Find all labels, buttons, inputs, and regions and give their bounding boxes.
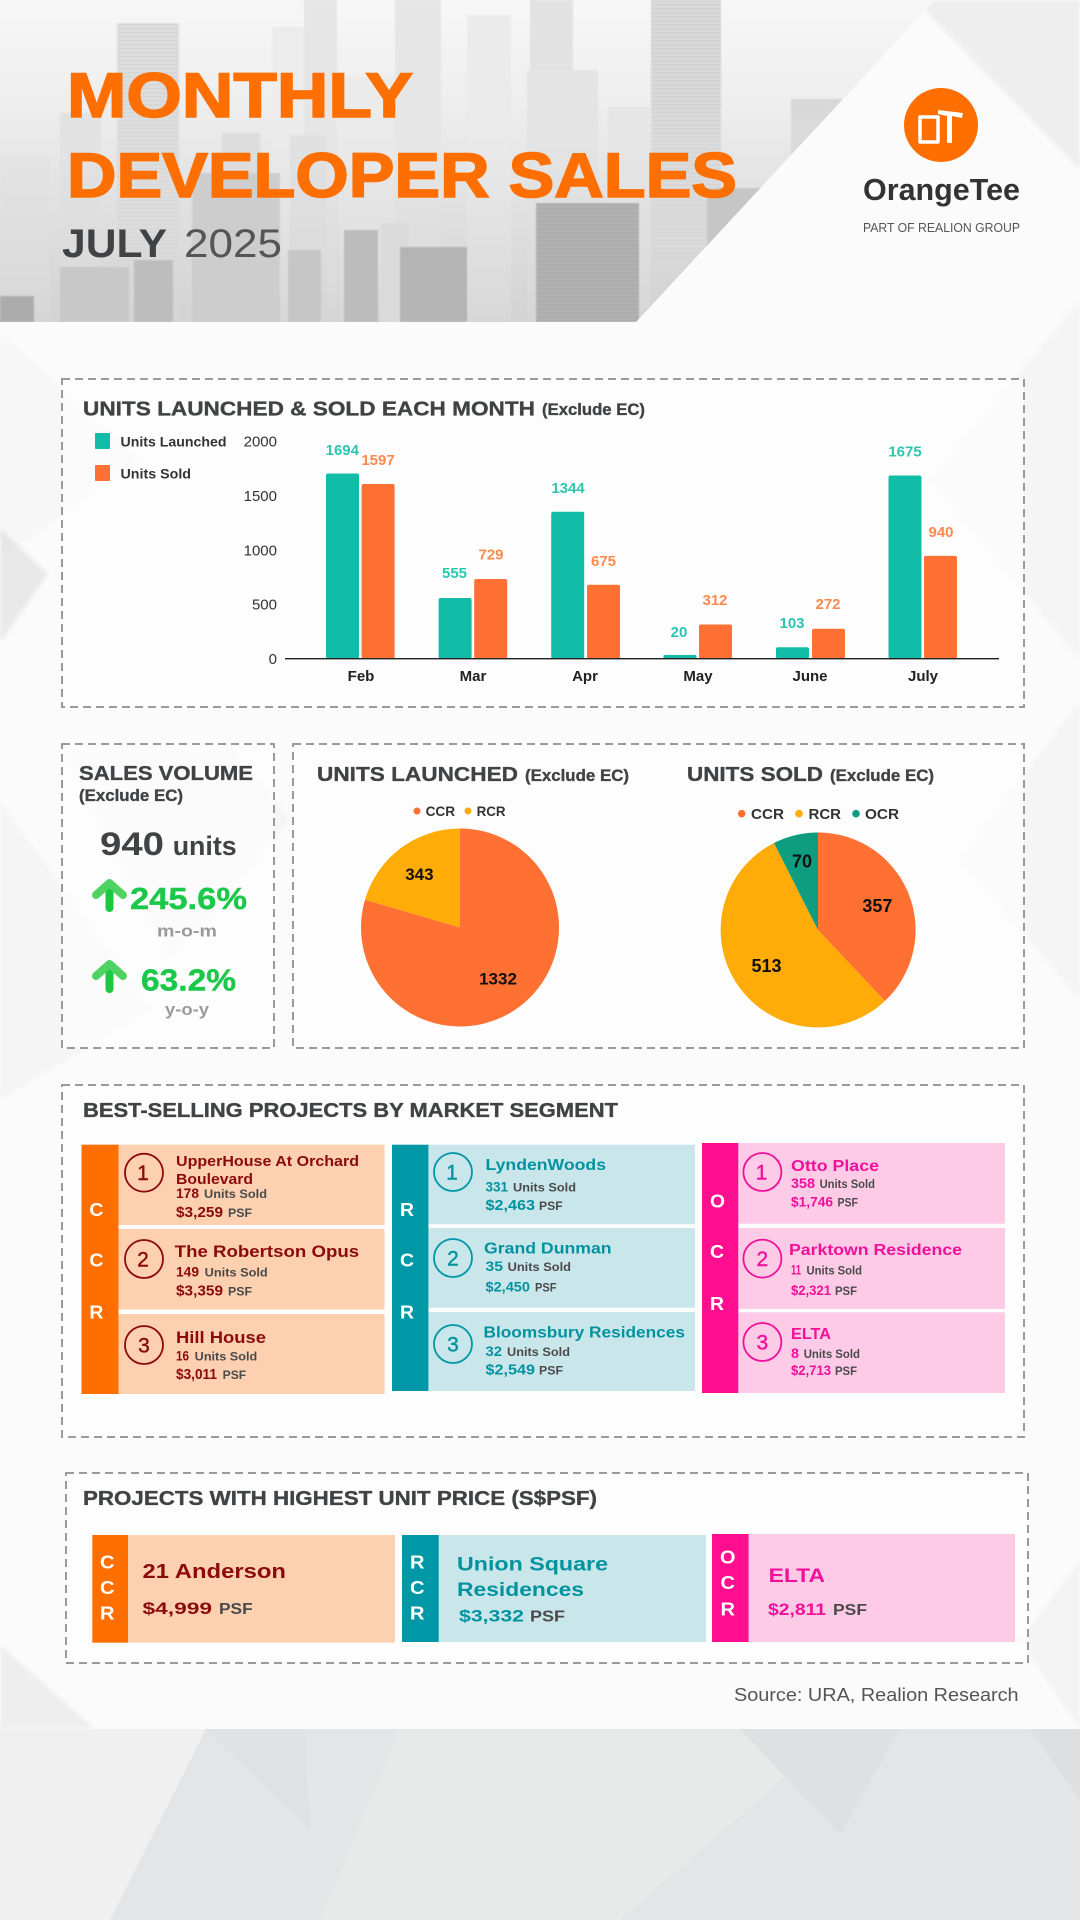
card: CCR 21 Anderson: PSF — [219, 1601, 253, 1618]
column: RCR — [392, 1145, 695, 1391]
heading: highest unit price: PROJECTS WITH HIGHEST UNIT PRICE (S$PSF) — [83, 1487, 597, 1510]
project: Hill House: PSF — [223, 1368, 246, 1382]
title: MONTHLY — [67, 61, 413, 131]
y axis labels: 500 — [252, 596, 277, 614]
project: Grand Dunman: $2,450 — [486, 1279, 530, 1295]
card: OCR ELTA: PSF — [833, 1602, 867, 1619]
subtitle: July 2025 — [62, 222, 282, 266]
title: DEVELOPER SALES — [67, 141, 737, 211]
project: Otto Place: $1,746 — [791, 1194, 833, 1210]
panel: units launched and sold each month — [62, 379, 1024, 707]
card: RCR Union Square Residences: R — [410, 1552, 424, 1572]
project: UpperHouse At Orchard Boulevard: UpperHouse At Orchard — [176, 1153, 359, 1170]
project: Parktown Residence: Units Sold — [806, 1266, 862, 1278]
heading: sales volume — [79, 763, 253, 805]
project: ELTA: 8 — [791, 1345, 799, 1361]
y axis labels — [244, 434, 277, 668]
icon: up arrow month on month — [96, 883, 123, 908]
project: Parktown Residence: 11 — [791, 1262, 801, 1278]
project: Bloomsbury Residences: 32 — [486, 1343, 502, 1359]
bar value labels: 312 — [702, 592, 728, 609]
card: OCR ELTA — [712, 1534, 1015, 1642]
project: Bloomsbury Residences — [484, 1324, 685, 1379]
stat: 940 units: 940 — [100, 826, 164, 862]
project: UpperHouse At Orchard Boulevard: Units Sold — [204, 1187, 267, 1201]
project: LyndenWoods: 331 — [486, 1178, 508, 1194]
legend — [95, 433, 226, 482]
legend: units sold pie: CCR — [751, 806, 784, 823]
panel: sales volume — [62, 744, 274, 1048]
stat: 245.6% m-o-m — [130, 881, 247, 940]
skyline header image — [0, 0, 940, 322]
project: The Robertson Opus: $3,359 — [176, 1284, 223, 1300]
project: Bloomsbury Residences: PSF — [539, 1364, 563, 1378]
logo: OrangeTee: PART OF REALION GROUP — [863, 221, 1020, 235]
column: RCR: 1 — [446, 1162, 458, 1184]
column: RCR: 2 — [447, 1248, 459, 1270]
column: RCR: C — [400, 1250, 414, 1270]
stat: 245.6% m-o-m: 245.6% — [130, 881, 247, 916]
project: The Robertson Opus: Units Sold — [205, 1266, 268, 1280]
heading: units sold — [687, 763, 934, 786]
month labels — [348, 668, 939, 685]
column: OCR: 1 — [756, 1162, 767, 1184]
project: UpperHouse At Orchard Boulevard: $3,259 — [176, 1205, 223, 1221]
card: CCR 21 Anderson — [92, 1535, 395, 1643]
project: UpperHouse At Orchard Boulevard — [176, 1153, 359, 1221]
project: UpperHouse At Orchard Boulevard: 178 — [176, 1185, 199, 1201]
project: Grand Dunman: PSF — [535, 1283, 556, 1295]
project: Otto Place: 358 — [791, 1175, 815, 1191]
project: Hill House: Hill House — [176, 1328, 266, 1347]
bar value labels: 940 — [928, 524, 954, 541]
heading: best-selling: BEST-SELLING PROJECTS BY MARKET SEGMENT — [83, 1099, 619, 1122]
column: CCR: 2 — [137, 1248, 149, 1272]
card: RCR Union Square Residences — [402, 1535, 706, 1642]
project: The Robertson Opus: 149 — [176, 1264, 199, 1280]
card: OCR ELTA: $2,811 — [768, 1600, 826, 1619]
stat: 940 units — [100, 826, 237, 862]
column: CCR — [82, 1145, 384, 1394]
y axis labels: 2000 — [244, 434, 277, 450]
column: OCR — [702, 1143, 1005, 1393]
project: Grand Dunman: 35 — [486, 1258, 503, 1274]
column: RCR: 3 — [447, 1334, 459, 1356]
heading: units launched: UNITS LAUNCHED — [317, 763, 518, 786]
column: CCR: C — [89, 1200, 103, 1220]
bar value labels: 1344 — [551, 480, 585, 497]
card: CCR 21 Anderson: $4,999 — [142, 1599, 212, 1618]
project: LyndenWoods: PSF — [539, 1199, 563, 1213]
panel: pie charts — [293, 744, 1024, 1048]
pie chart: units launched: 1332 — [479, 970, 517, 988]
bar value labels: 729 — [478, 546, 504, 564]
project: Parktown Residence: PSF — [835, 1286, 857, 1298]
icon: up arrow year on year — [96, 964, 123, 989]
stat: 63.2% y-o-y: y-o-y — [165, 1001, 210, 1019]
bar value labels — [326, 442, 954, 641]
legend: units launched pie: RCR — [477, 803, 506, 819]
project: Hill House: $3,011 — [176, 1367, 217, 1383]
column: CCR: R — [89, 1302, 103, 1322]
bar value labels: 103 — [779, 615, 805, 632]
legend: Units Sold — [120, 466, 191, 482]
project: Otto Place: Units Sold — [820, 1179, 875, 1191]
project: The Robertson Opus: The Robertson Opus — [175, 1242, 359, 1261]
column: OCR: R — [710, 1294, 724, 1314]
project: ELTA: PSF — [835, 1366, 857, 1378]
column: RCR: R — [400, 1302, 414, 1322]
subtitle: July 2025: JULY — [62, 222, 167, 266]
y axis labels: 1000 — [244, 542, 277, 560]
month labels: Mar — [460, 668, 486, 685]
bar value labels: 1675 — [888, 444, 922, 460]
bar value labels: 675 — [591, 553, 616, 570]
legend: units sold pie: OCR — [865, 806, 899, 823]
y axis labels: 0 — [269, 651, 277, 668]
pie chart: units sold: 357 — [862, 896, 892, 916]
column: OCR: 2 — [757, 1248, 768, 1271]
card: CCR 21 Anderson: C — [100, 1578, 114, 1598]
project: Hill House — [176, 1328, 266, 1383]
column: CCR: C — [89, 1250, 103, 1270]
project: The Robertson Opus: PSF — [228, 1285, 252, 1299]
stat: 63.2% y-o-y — [141, 962, 236, 1019]
heading: units sold: UNITS SOLD — [687, 763, 823, 786]
bar value labels: 272 — [815, 596, 841, 613]
legend: units launched pie: CCR — [426, 803, 455, 819]
stat: 940 units: units — [173, 831, 237, 861]
pie chart: units sold: 70 — [792, 852, 812, 872]
month labels: Apr — [572, 668, 598, 685]
project: Parktown Residence — [789, 1242, 962, 1298]
column: CCR: 1 — [137, 1162, 149, 1185]
project: LyndenWoods: Units Sold — [513, 1180, 576, 1194]
project: Otto Place: PSF — [838, 1198, 858, 1210]
project: LyndenWoods: $2,463 — [486, 1198, 535, 1214]
project: Hill House: 16 — [176, 1348, 189, 1364]
stat: 245.6% m-o-m: m-o-m — [157, 922, 217, 940]
heading: units sold: (Exclude EC) — [830, 767, 934, 785]
month labels: July — [908, 668, 939, 685]
pie chart: units launched: 343 — [405, 865, 434, 884]
legend: units launched pie — [414, 803, 506, 819]
project: Grand Dunman: Units Sold — [508, 1260, 571, 1274]
logo: OrangeTee — [863, 88, 1020, 235]
project: UpperHouse At Orchard Boulevard: PSF — [228, 1206, 252, 1220]
bar chart — [285, 474, 999, 659]
card: OCR ELTA: R — [720, 1600, 735, 1620]
project: Grand Dunman: Grand Dunman — [484, 1240, 612, 1258]
project: UpperHouse At Orchard Boulevard: Boulevard — [176, 1171, 253, 1188]
y axis labels: 1500 — [244, 488, 277, 505]
source note: Source: URA, Realion Research — [734, 1684, 1019, 1705]
bar value labels: 555 — [442, 565, 467, 582]
column: OCR: C — [710, 1242, 724, 1262]
column: OCR: O — [710, 1192, 725, 1212]
bar value labels: 1694 — [326, 442, 360, 459]
card: CCR 21 Anderson: R — [100, 1604, 114, 1624]
project: Parktown Residence: Parktown Residence — [789, 1242, 962, 1259]
bar value labels: 1597 — [361, 452, 395, 469]
project: ELTA: Units Sold — [804, 1349, 860, 1361]
project: ELTA — [791, 1326, 860, 1378]
project: Hill House: Units Sold — [195, 1350, 257, 1364]
heading: units launched — [317, 763, 629, 786]
pie chart: units launched — [361, 828, 559, 1026]
legend: Units Launched — [120, 434, 226, 450]
pie chart: units sold — [721, 832, 916, 1027]
heading: units launched and sold: (Exclude EC) — [542, 401, 645, 419]
project: Bloomsbury Residences: Bloomsbury Residences — [484, 1324, 685, 1342]
month labels: June — [792, 668, 828, 685]
stat: 63.2% y-o-y: 63.2% — [141, 962, 236, 998]
card: RCR Union Square Residences: C — [410, 1578, 424, 1598]
card: CCR 21 Anderson: C — [100, 1552, 114, 1572]
column: RCR: R — [400, 1200, 414, 1220]
heading: units launched: (Exclude EC) — [525, 767, 629, 785]
column: OCR: 3 — [757, 1332, 768, 1354]
card: RCR Union Square Residences: Union Square — [457, 1554, 608, 1576]
card: RCR Union Square Residences: $3,332 — [459, 1607, 524, 1626]
project: LyndenWoods: LyndenWoods — [486, 1157, 606, 1174]
panel: projects with highest unit price — [66, 1473, 1028, 1663]
column: CCR: 3 — [138, 1334, 150, 1358]
legend: units sold pie: RCR — [808, 806, 841, 823]
heading: sales volume: SALES VOLUME — [79, 763, 253, 785]
heading: sales volume: (Exclude EC) — [79, 787, 183, 805]
bar value labels: 20 — [671, 624, 687, 641]
title — [67, 61, 737, 211]
project: Otto Place: Otto Place — [791, 1158, 879, 1175]
heading: units launched and sold: UNITS LAUNCHED & SOLD EACH MONTH — [83, 398, 535, 420]
project: Grand Dunman — [484, 1240, 612, 1295]
project: Bloomsbury Residences: $2,549 — [486, 1363, 535, 1379]
card: OCR ELTA: O — [720, 1548, 736, 1568]
project: ELTA: $2,713 — [791, 1362, 831, 1378]
project: The Robertson Opus — [175, 1242, 359, 1300]
card: OCR ELTA: C — [720, 1573, 735, 1593]
card: CCR 21 Anderson: 21 Anderson — [142, 1561, 286, 1583]
subtitle: July 2025: 2025 — [184, 222, 282, 266]
pie chart: units sold: 513 — [751, 956, 782, 976]
project: ELTA: ELTA — [791, 1326, 831, 1343]
project: Otto Place — [791, 1158, 879, 1210]
card: RCR Union Square Residences: R — [410, 1604, 424, 1624]
project: Parktown Residence: $2,321 — [791, 1282, 831, 1298]
project: LyndenWoods — [486, 1157, 606, 1214]
legend: units sold pie — [738, 806, 899, 823]
card: RCR Union Square Residences: PSF — [530, 1609, 565, 1626]
month labels: May — [683, 668, 713, 685]
panel: best-selling projects by market segment — [62, 1085, 1024, 1437]
logo: OrangeTee: OrangeTee — [863, 172, 1020, 207]
project: Bloomsbury Residences: Units Sold — [507, 1345, 570, 1359]
month labels: Feb — [348, 668, 374, 685]
card: RCR Union Square Residences: Residences — [457, 1579, 584, 1601]
card: OCR ELTA: ELTA — [769, 1565, 825, 1587]
